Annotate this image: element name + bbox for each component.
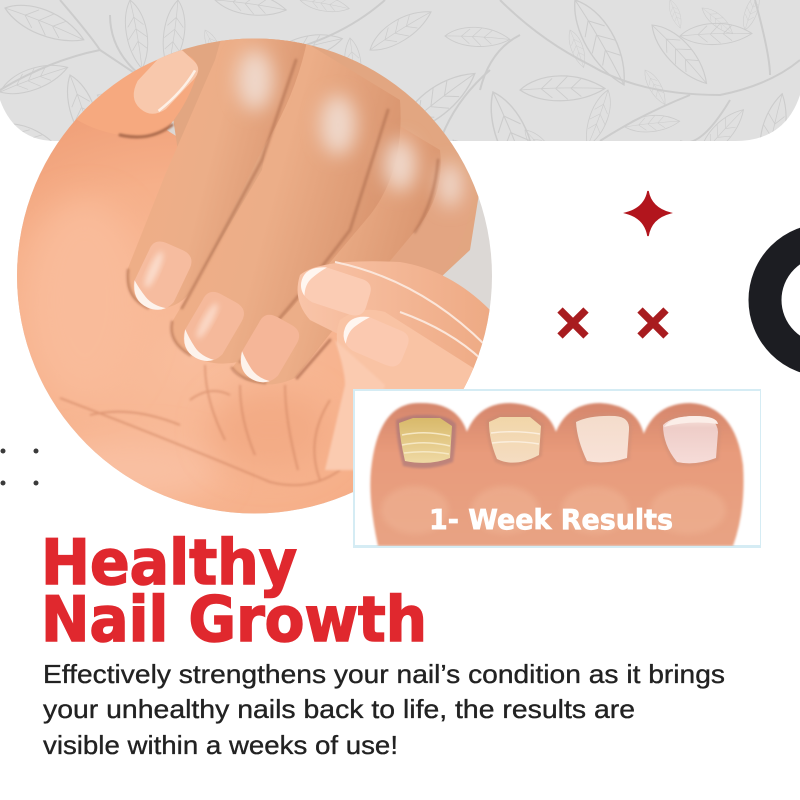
nail: finger 3 <box>240 314 299 382</box>
palm <box>0 100 500 520</box>
finger 3 <box>232 138 441 384</box>
icon: red cross right <box>640 310 666 336</box>
thumb mound <box>25 200 330 500</box>
finger 1 <box>127 25 310 309</box>
thumb <box>76 56 196 130</box>
finger 2 <box>171 30 401 364</box>
nail 2: fading <box>486 414 544 466</box>
banner: grey leaf pattern <box>0 0 800 141</box>
nail: finger 1 <box>134 242 192 310</box>
toes caption: 1- Week Results <box>429 503 673 536</box>
title <box>41 526 427 656</box>
body text: visible within a weeks of use! <box>43 730 398 760</box>
toe 1 <box>370 403 470 546</box>
nail 4: healthy <box>662 416 720 466</box>
toe 2 <box>459 403 560 546</box>
icon: black ring <box>765 240 800 360</box>
nail 3: nearly clear <box>576 416 630 465</box>
palm creases <box>60 365 340 485</box>
dots <box>0 448 38 486</box>
photo background <box>17 121 492 514</box>
icon: red four-point star <box>626 191 670 236</box>
photo: manicured hand in a circle <box>0 25 500 520</box>
nail: right finger 2 <box>344 316 408 366</box>
back of hand <box>164 38 478 276</box>
icon: red cross left <box>560 310 586 336</box>
toe 4 <box>636 403 744 546</box>
knuckles <box>237 50 462 207</box>
finger nails <box>134 242 408 382</box>
finger 4 <box>385 159 472 285</box>
nail: right finger 1 <box>301 267 371 316</box>
title: Healthy <box>41 526 297 599</box>
leaf pattern <box>0 0 800 141</box>
body text: Effectively strengthens your nail’s condition as it brings <box>43 659 725 689</box>
photo: four toes before and after <box>353 389 761 548</box>
nail: finger 2 <box>184 292 244 361</box>
title: Nail Growth <box>41 583 427 656</box>
thumb nail <box>134 50 198 114</box>
right hand fingers <box>298 261 500 470</box>
nail 1: yellow <box>396 415 456 468</box>
finger shadows <box>120 60 438 383</box>
body text <box>43 659 725 760</box>
body text: your unhealthy nails back to life, the results are <box>43 694 635 724</box>
toe 3 <box>548 403 648 546</box>
